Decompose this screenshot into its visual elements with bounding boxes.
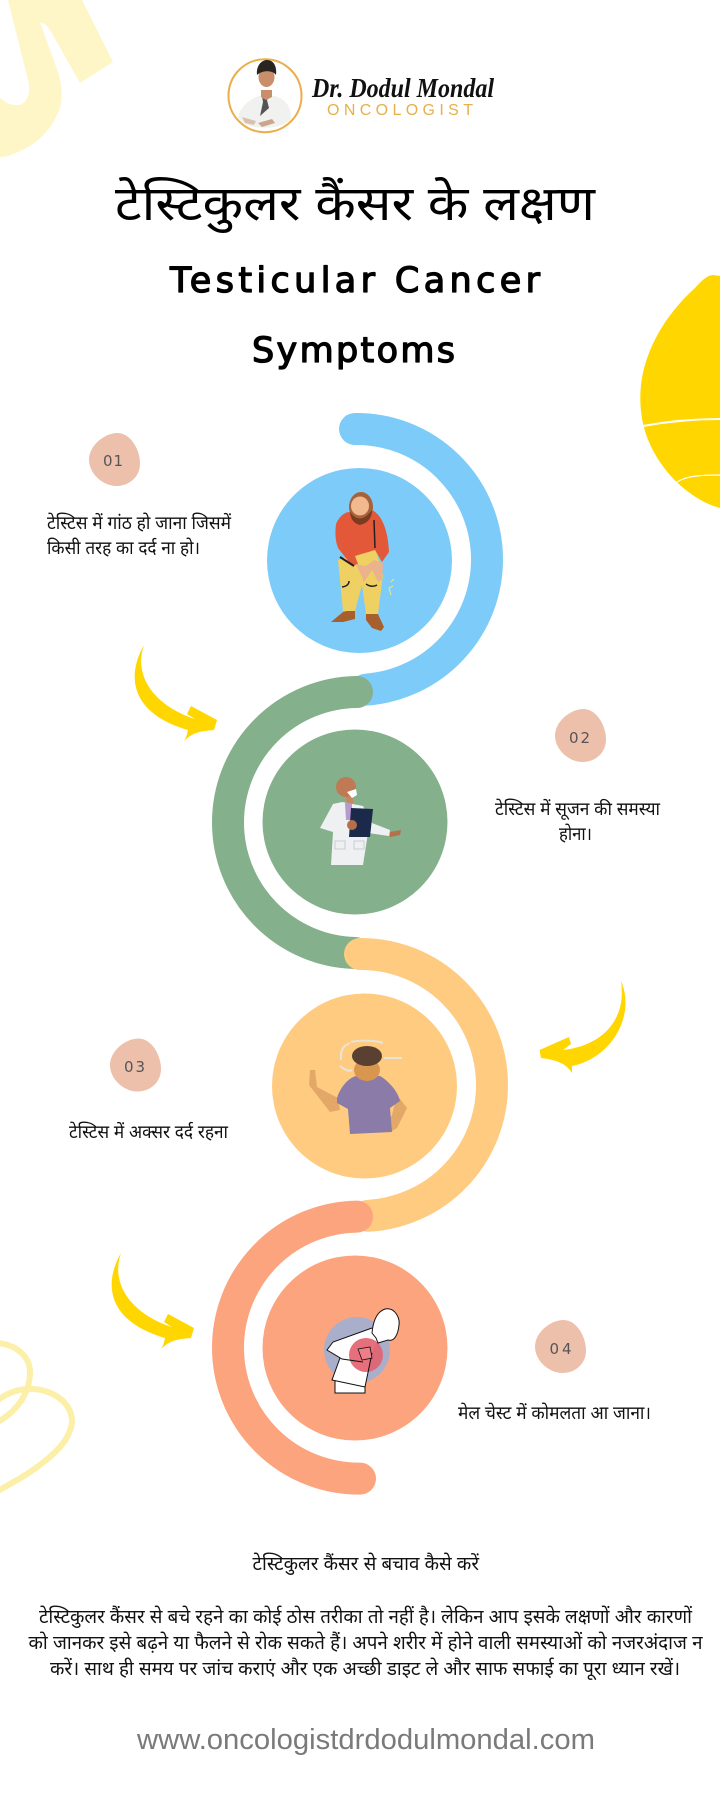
blue arc	[355, 429, 487, 690]
step 1 text: किसी तरह का दर्द ना हो।	[47, 537, 200, 558]
number badge 03	[110, 1038, 161, 1092]
green arc	[228, 692, 357, 953]
number badge 01: 01	[103, 452, 123, 470]
website url: www.oncologistdrdodulmondal.com	[136, 1724, 595, 1756]
number badge 02	[555, 709, 606, 762]
arrow 3	[112, 1253, 194, 1349]
salmon arc	[228, 1217, 360, 1479]
icon: doctor with clipboard	[320, 777, 401, 865]
panel: step 1	[47, 429, 487, 690]
logo subtitle: ONCOLOGIST	[327, 102, 473, 119]
icon: man clutching chest	[324, 1309, 399, 1393]
step 4 text: मेल चेस्ट में कोमलता आ जाना।	[458, 1402, 651, 1423]
logo portrait	[228, 59, 302, 132]
prevention heading: टेस्टिकुलर कैंसर से बचाव कैसे करें	[252, 1552, 480, 1576]
blue circle	[267, 468, 452, 653]
number badge 02: 02	[569, 729, 590, 747]
prevention paragraph	[28, 1605, 704, 1681]
step 1 text	[47, 512, 232, 558]
title english line 2: Symptoms	[252, 331, 455, 371]
icon: man holding knee	[331, 492, 394, 631]
orange arc	[360, 954, 492, 1216]
prevention paragraph: करें। साथ ही समय पर जांच कराएं और एक अच्छी डाइट ले और साफ सफाई का पूरा ध्यान रखें।	[50, 1657, 680, 1681]
logo name: Dr. Dodul Mondal	[311, 73, 494, 103]
step 3 text: टेस्टिस में अक्सर दर्द रहना	[69, 1121, 228, 1142]
step 1 text: टेस्टिस में गांठ हो जाना जिसमें	[47, 512, 232, 533]
arrow 1	[135, 645, 217, 741]
panel: step 2	[228, 692, 660, 953]
step 2 text: टेस्टिस में सूजन की समस्या	[495, 798, 660, 821]
decoration: pale yellow swoosh top-left	[0, 0, 113, 157]
title hindi: टेस्टिकुलर कैंसर के लक्षण	[115, 176, 596, 234]
number badge 04	[535, 1320, 586, 1373]
decoration: yellow scribble bottom-left	[0, 1343, 72, 1491]
decoration: yellow blob right	[640, 275, 720, 508]
title english line 1: Testicular Cancer	[169, 261, 541, 301]
number badge 04: 04	[550, 1340, 572, 1358]
green circle	[262, 730, 448, 914]
icon: boy with headache	[309, 1041, 407, 1134]
orange circle	[272, 994, 457, 1178]
prevention paragraph: को जानकर इसे बढ़ने या फैलने से रोक सकते हैं। अपने शरीर में होने वाली समस्याओं को नजरअंदाज न	[28, 1631, 704, 1654]
step 2 text	[495, 798, 660, 844]
logo	[228, 59, 494, 132]
arrow 2	[540, 981, 626, 1073]
salmon circle	[262, 1256, 448, 1440]
panel: step 3	[69, 954, 492, 1216]
step 2 text: होना।	[559, 824, 592, 844]
panel: step 4	[228, 1217, 651, 1479]
number badge 01	[89, 433, 140, 486]
number badge 03: 03	[124, 1058, 145, 1076]
prevention paragraph: टेस्टिकुलर कैंसर से बचे रहने का कोई ठोस तरीका तो नहीं है। लेकिन आप इसके लक्षणों और कारणों	[39, 1605, 693, 1629]
